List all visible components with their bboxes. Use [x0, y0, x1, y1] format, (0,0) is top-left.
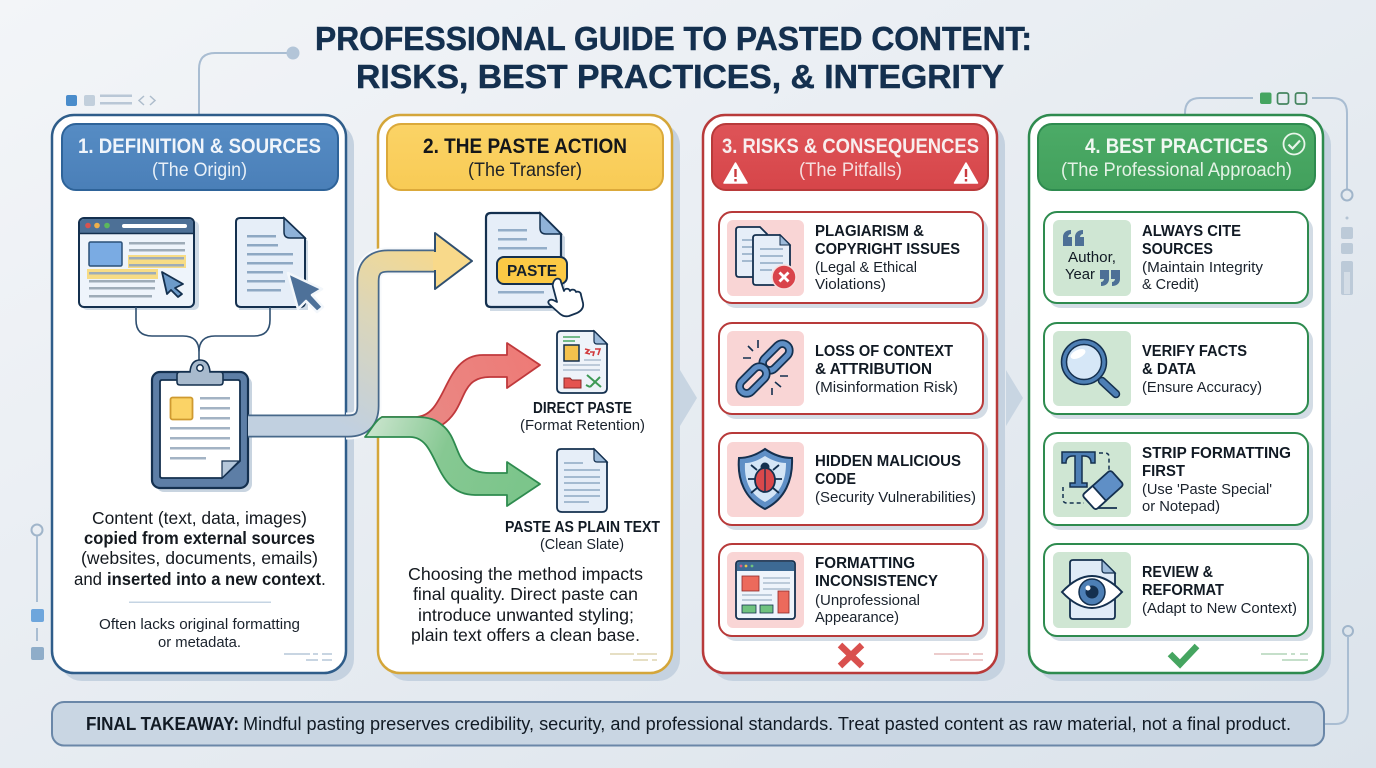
text: review and reformat: (Adapt to New Context): [1142, 600, 1297, 617]
text: plain text label: (Clean Slate): [540, 536, 624, 553]
connectors: sources to clipboard: [136, 307, 270, 368]
icon: messy document: [557, 331, 607, 393]
decoration: lower right connector: [1324, 626, 1353, 724]
text: loss of context: LOSS OF CONTEXT: [815, 343, 953, 360]
decoration: lower left connector: [31, 524, 44, 660]
icon: document with eye: [1062, 560, 1122, 619]
text: definition body: copied from external sources: [84, 528, 315, 548]
header: risks: (The Pitfalls): [799, 160, 902, 181]
text: definition body: Content (text, data, images): [92, 508, 307, 528]
text: definition body: inserted into a new context: [107, 569, 321, 589]
card: review and reformat: [1044, 544, 1313, 641]
text: cite sources: & Credit): [1142, 276, 1199, 293]
card: cite sources: [1044, 212, 1313, 308]
text: direct paste label: [520, 400, 645, 434]
icon: document with paste button: PASTE: [507, 263, 557, 280]
callout: final takeaway: [52, 702, 1324, 746]
text: formatting inconsistency: [815, 555, 938, 626]
title: [315, 20, 1032, 95]
panel: definition and sources: [52, 115, 354, 681]
text: direct paste label: DIRECT PASTE: [533, 400, 632, 417]
chevron: panel 2 to 3: [680, 370, 697, 426]
icon: magnifying glass: [1064, 342, 1116, 394]
card: malicious code: [719, 433, 988, 530]
text: cite sources: SOURCES: [1142, 241, 1213, 258]
panel: risks and consequences: [703, 115, 1005, 681]
text: formatting inconsistency: INCONSISTENCY: [815, 573, 938, 590]
text: cite sources: (Maintain Integrity: [1142, 259, 1264, 276]
icon: green check: [1170, 646, 1197, 664]
title: PROFESSIONAL GUIDE TO PASTED CONTENT:: [315, 20, 1032, 57]
text: formatting inconsistency: Appearance): [815, 609, 899, 626]
text: formatting inconsistency: FORMATTING: [815, 555, 915, 572]
text: verify facts: [1142, 343, 1262, 396]
header: risks: 3. RISKS & CONSEQUENCES: [722, 134, 979, 158]
text: paste action body: [408, 564, 643, 645]
text: verify facts: VERIFY FACTS: [1142, 343, 1247, 360]
callout: final takeaway: Mindful pasting preserves credibility, security, and professional standards. Treat pasted content as raw material, not a final product.: [243, 714, 1291, 734]
text: malicious code: [815, 453, 976, 506]
text: plagiarism: (Legal & Ethical: [815, 259, 917, 276]
text: review and reformat: REVIEW &: [1142, 564, 1213, 581]
text: plagiarism: Violations): [815, 276, 886, 293]
header: paste action: (The Transfer): [468, 160, 582, 181]
text: malicious code: (Security Vulnerabilities): [815, 489, 976, 506]
text: loss of context: (Misinformation Risk): [815, 379, 958, 396]
icon: text and eraser: [1062, 452, 1124, 510]
icon: document with cursor: [236, 218, 323, 312]
card: strip formatting: [1044, 433, 1313, 530]
header: best practices: 4. BEST PRACTICES: [1085, 134, 1268, 158]
text: formatting inconsistency: (Unprofessional: [815, 592, 920, 609]
text: strip formatting: FIRST: [1142, 463, 1185, 480]
text: verify facts: & DATA: [1142, 361, 1196, 378]
text: strip formatting: (Use 'Paste Special': [1142, 481, 1272, 498]
text: verify facts: (Ensure Accuracy): [1142, 379, 1262, 396]
decoration: top right connector and controls: [1185, 92, 1353, 295]
text: definition note: or metadata.: [158, 634, 241, 651]
panel: the paste action: [378, 115, 680, 681]
icon: browser window with selected text: [79, 218, 199, 310]
header: definition: (The Origin): [152, 160, 247, 181]
icon: warning left: [724, 163, 747, 183]
card: loss of context: [719, 323, 988, 419]
text: direct paste label: (Format Retention): [520, 417, 645, 434]
text: plain text label: [505, 519, 660, 553]
icon: plain document: [557, 449, 607, 512]
header: definition: [62, 124, 338, 190]
text: definition body: and: [74, 569, 102, 589]
text: paste action body: introduce unwanted styling;: [418, 605, 634, 625]
icon: document with paste button: [486, 213, 583, 316]
header: definition: 1. DEFINITION & SOURCES: [78, 134, 321, 158]
panel: best practices: [1029, 115, 1331, 681]
header: paste action: [387, 124, 663, 190]
text: strip formatting: STRIP FORMATTING: [1142, 445, 1291, 462]
header: best practices: (The Professional Approach): [1061, 160, 1292, 181]
header: best practices: [1038, 124, 1315, 190]
text: paste action body: plain text offers a clean base.: [411, 625, 640, 645]
text: malicious code: CODE: [815, 471, 856, 488]
card: plagiarism: [719, 212, 988, 308]
card: formatting inconsistency: [719, 544, 988, 641]
text: definition note: Often lacks original formatting: [99, 616, 300, 633]
text: paste action body: Choosing the method impacts: [408, 564, 643, 584]
icon: check circle: [1284, 134, 1304, 154]
icon: inconsistent layout: [736, 561, 795, 619]
text: cite sources: [1142, 223, 1264, 293]
callout: final takeaway: FINAL TAKEAWAY:: [86, 714, 239, 734]
text: loss of context: [815, 343, 958, 396]
icon: citation quote marks: Author,: [1068, 249, 1116, 266]
text: strip formatting: or Notepad): [1142, 498, 1220, 515]
text: plain text label: PASTE AS PLAIN TEXT: [505, 519, 660, 536]
title: RISKS, BEST PRACTICES, & INTEGRITY: [356, 58, 1004, 95]
text: definition body: .: [321, 569, 326, 589]
icon: copied documents: [736, 227, 796, 289]
icon: citation quote marks: Year: [1065, 266, 1095, 283]
arrow: green plain text path: [365, 417, 540, 506]
decoration: top left connector and toolbar: [66, 46, 300, 116]
arrow: red direct paste path: [382, 343, 540, 425]
card: verify facts: [1044, 323, 1313, 419]
text: definition note: [99, 616, 300, 651]
text: plagiarism: PLAGIARISM &: [815, 223, 924, 240]
text: review and reformat: [1142, 564, 1297, 617]
arrow: clipboard to paste document: [248, 233, 472, 426]
icon: warning right: [954, 163, 978, 183]
text: malicious code: HIDDEN MALICIOUS: [815, 453, 961, 470]
icon: red cross: [840, 645, 862, 666]
text: strip formatting: [1142, 445, 1291, 515]
chevron: panel 3 to 4: [1006, 370, 1023, 426]
header: paste action: 2. THE PASTE ACTION: [423, 134, 627, 158]
text: definition body: [74, 508, 326, 589]
text: definition body: (websites, documents, emails): [81, 548, 318, 568]
text: cite sources: ALWAYS CITE: [1142, 223, 1241, 240]
text: review and reformat: REFORMAT: [1142, 582, 1224, 599]
header: risks: [712, 124, 988, 190]
icon: citation quote marks: [1063, 230, 1120, 286]
icon: clipboard: [152, 360, 252, 492]
text: loss of context: & ATTRIBUTION: [815, 361, 932, 378]
icon: broken chain: [737, 340, 792, 396]
text: plagiarism: [815, 223, 960, 293]
text: plagiarism: COPYRIGHT ISSUES: [815, 241, 960, 258]
text: paste action body: final quality. Direct paste can: [413, 584, 638, 604]
icon: shield with bug: [739, 449, 792, 509]
